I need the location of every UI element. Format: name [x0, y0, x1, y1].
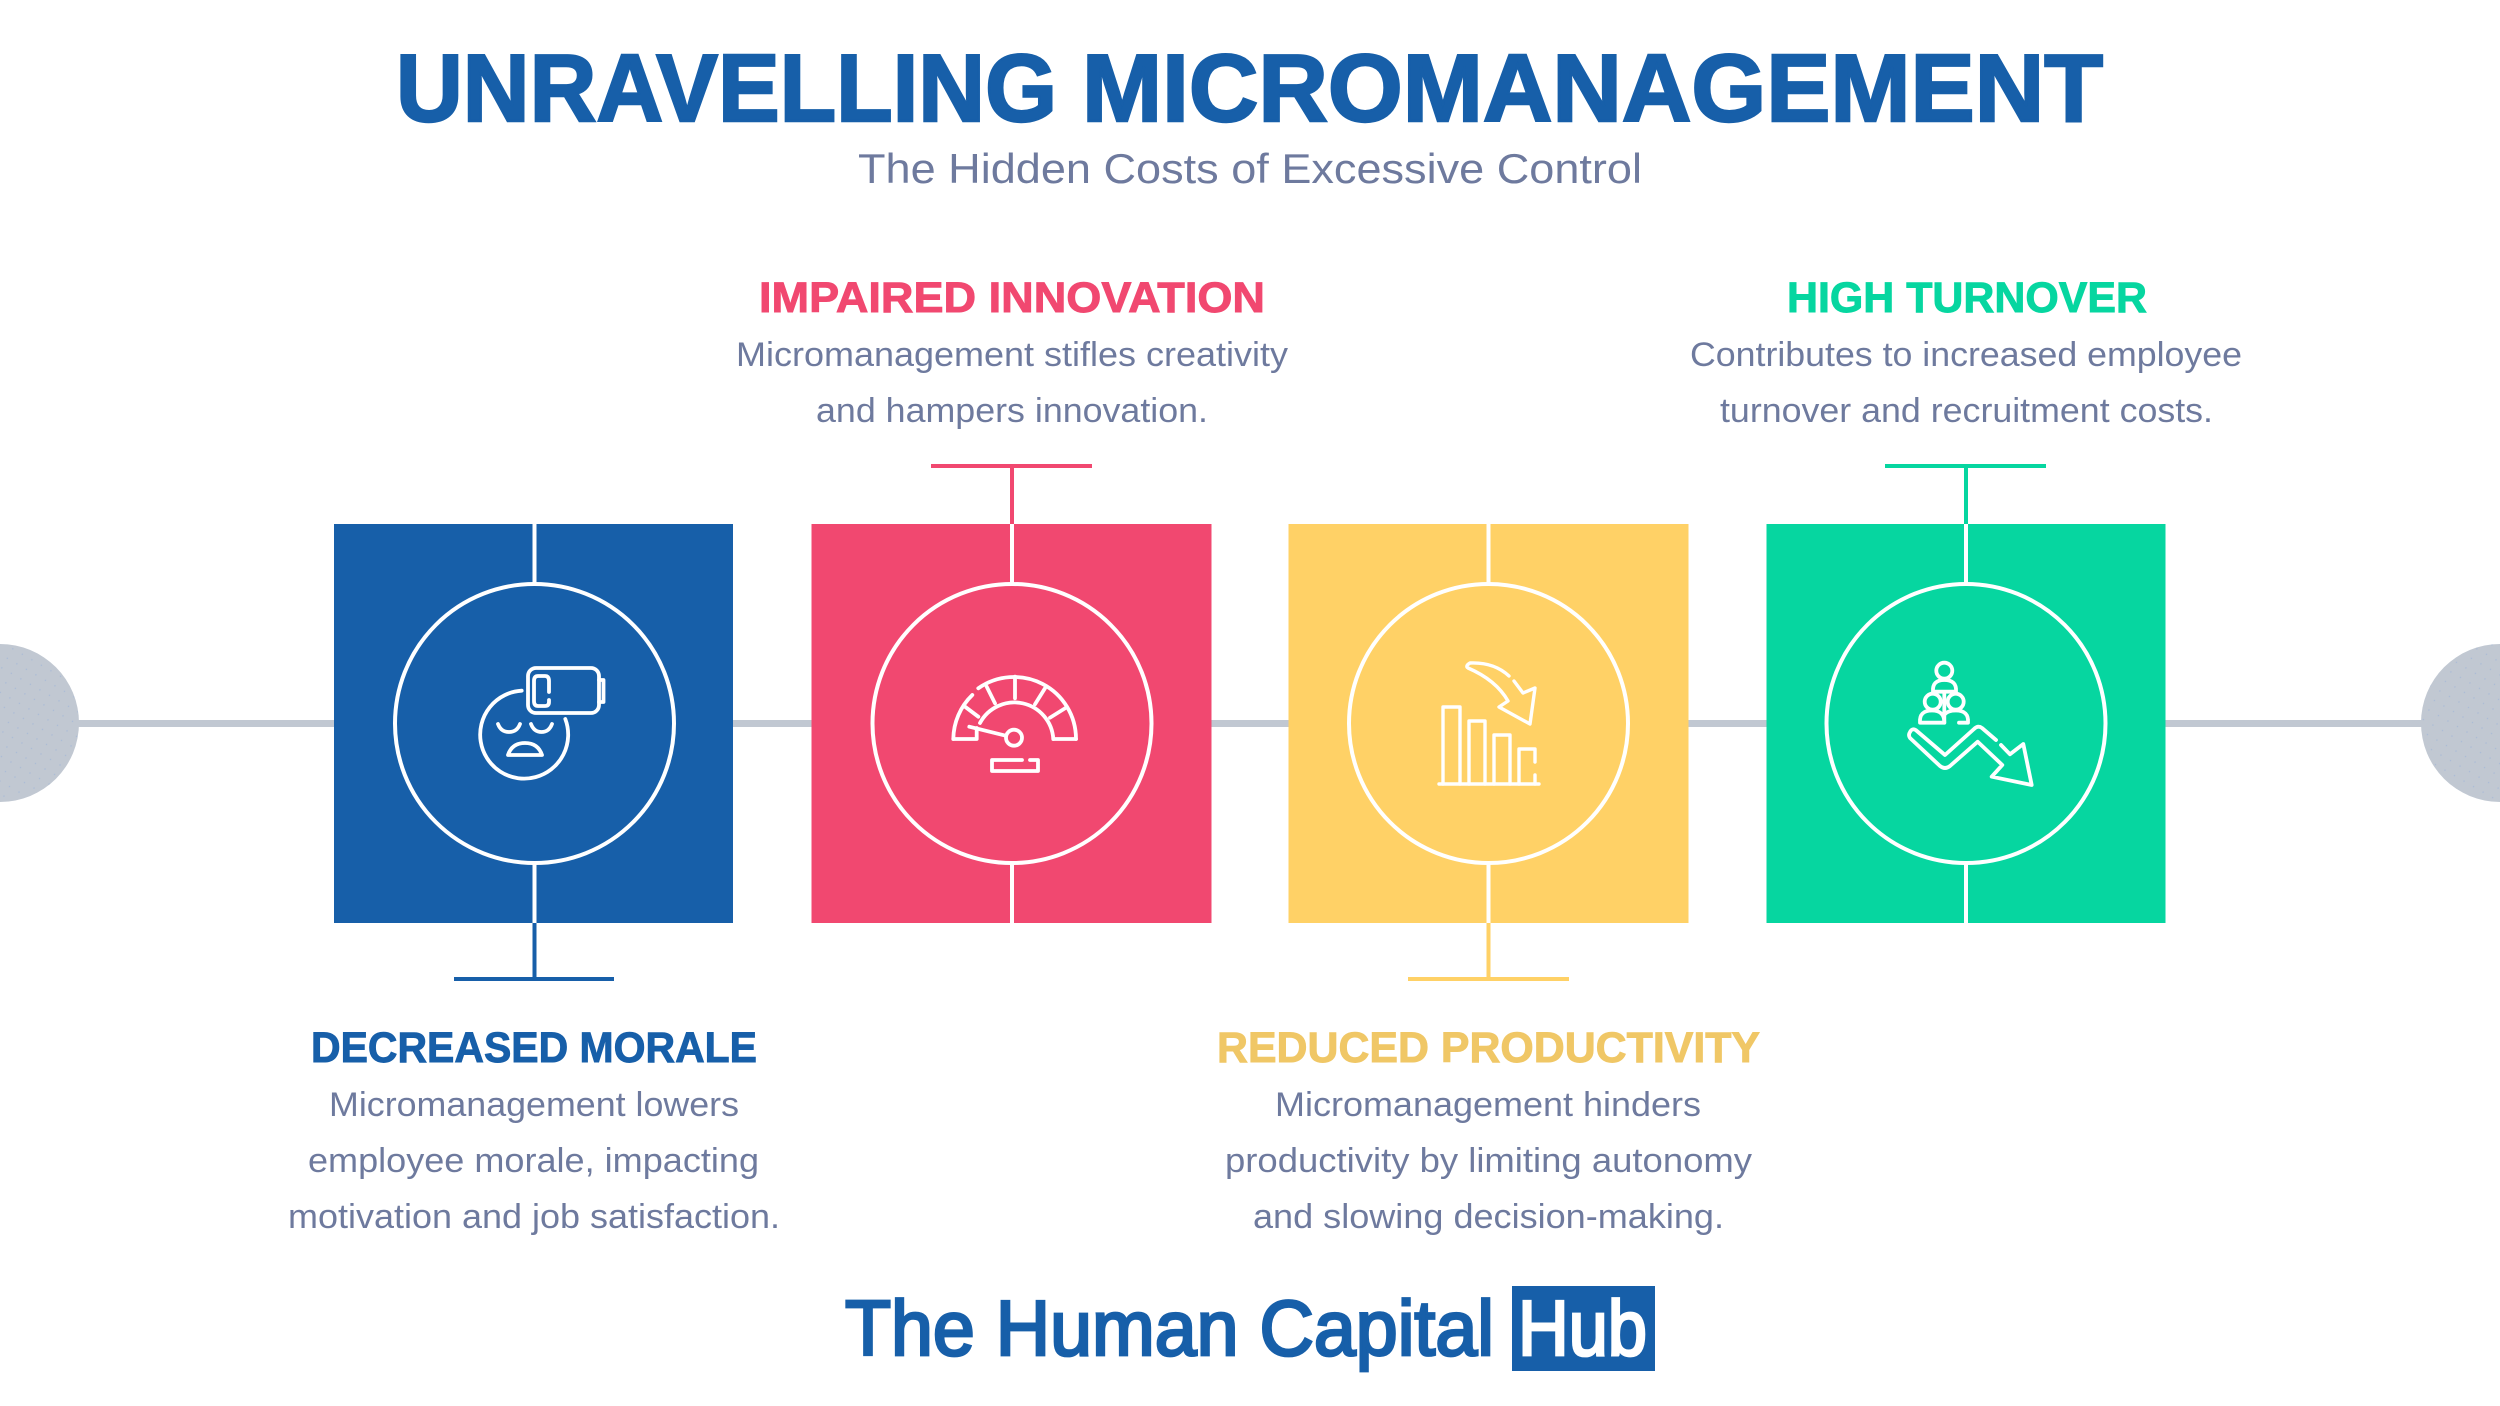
- text block: decreased morale: [288, 1024, 780, 1236]
- text block: high turnover: turnover and recruitment costs.: [1720, 392, 2213, 430]
- text block: high turnover: [1690, 274, 2242, 430]
- logo: The Human Capital Hub: The Human Capital: [845, 1284, 1494, 1372]
- text block: reduced productivity: and slowing decision-making.: [1253, 1198, 1724, 1236]
- title: UNRAVELLING: [396, 35, 1057, 142]
- text block: impaired innovation: IMPAIRED INNOVATION: [759, 274, 1265, 322]
- icon: falling bar chart: [1439, 663, 1539, 784]
- subtitle: The Hidden Costs of Excessive Control: [858, 145, 1642, 192]
- text block: reduced productivity: productivity by limiting autonomy: [1225, 1142, 1752, 1180]
- logo: The Human Capital Hub: Hub: [1518, 1284, 1647, 1372]
- text block: impaired innovation: [736, 274, 1288, 430]
- text block: high turnover: HIGH TURNOVER: [1787, 274, 2147, 322]
- text block: reduced productivity: [1217, 1024, 1760, 1236]
- text block: impaired innovation: Micromanagement stifles creativity: [736, 336, 1288, 374]
- title: MICROMANAGEMENT: [1082, 35, 2103, 142]
- text block: reduced productivity: REDUCED PRODUCTIVITY: [1217, 1024, 1760, 1072]
- connector: decreased morale: [454, 923, 614, 979]
- icon: people with falling arrow: [1909, 663, 2032, 785]
- icon: speedometer gauge: [953, 677, 1076, 771]
- text block: decreased morale: motivation and job satisfaction.: [288, 1198, 780, 1236]
- left end cap: [0, 644, 79, 802]
- panel: high turnover: [1766, 524, 2166, 923]
- panel: impaired innovation: [812, 524, 1212, 923]
- right end cap: [2421, 644, 2500, 802]
- title: [396, 35, 2103, 142]
- text block: reduced productivity: Micromanagement hinders: [1275, 1086, 1701, 1124]
- text block: high turnover: Contributes to increased employee: [1690, 336, 2242, 374]
- timeline line: [70, 720, 2430, 727]
- connector: impaired innovation: [931, 466, 1092, 524]
- panel: decreased morale: [334, 524, 733, 923]
- panel: reduced productivity: [1288, 524, 1688, 923]
- text block: impaired innovation: and hampers innovation.: [816, 392, 1208, 430]
- connector: reduced productivity: [1408, 923, 1569, 979]
- text block: decreased morale: DECREASED MORALE: [311, 1024, 757, 1072]
- text block: decreased morale: Micromanagement lowers: [329, 1086, 739, 1124]
- connector: high turnover: [1885, 466, 2046, 524]
- text block: decreased morale: employee morale, impacting: [308, 1142, 759, 1180]
- icon: tired face with low battery: [480, 668, 604, 779]
